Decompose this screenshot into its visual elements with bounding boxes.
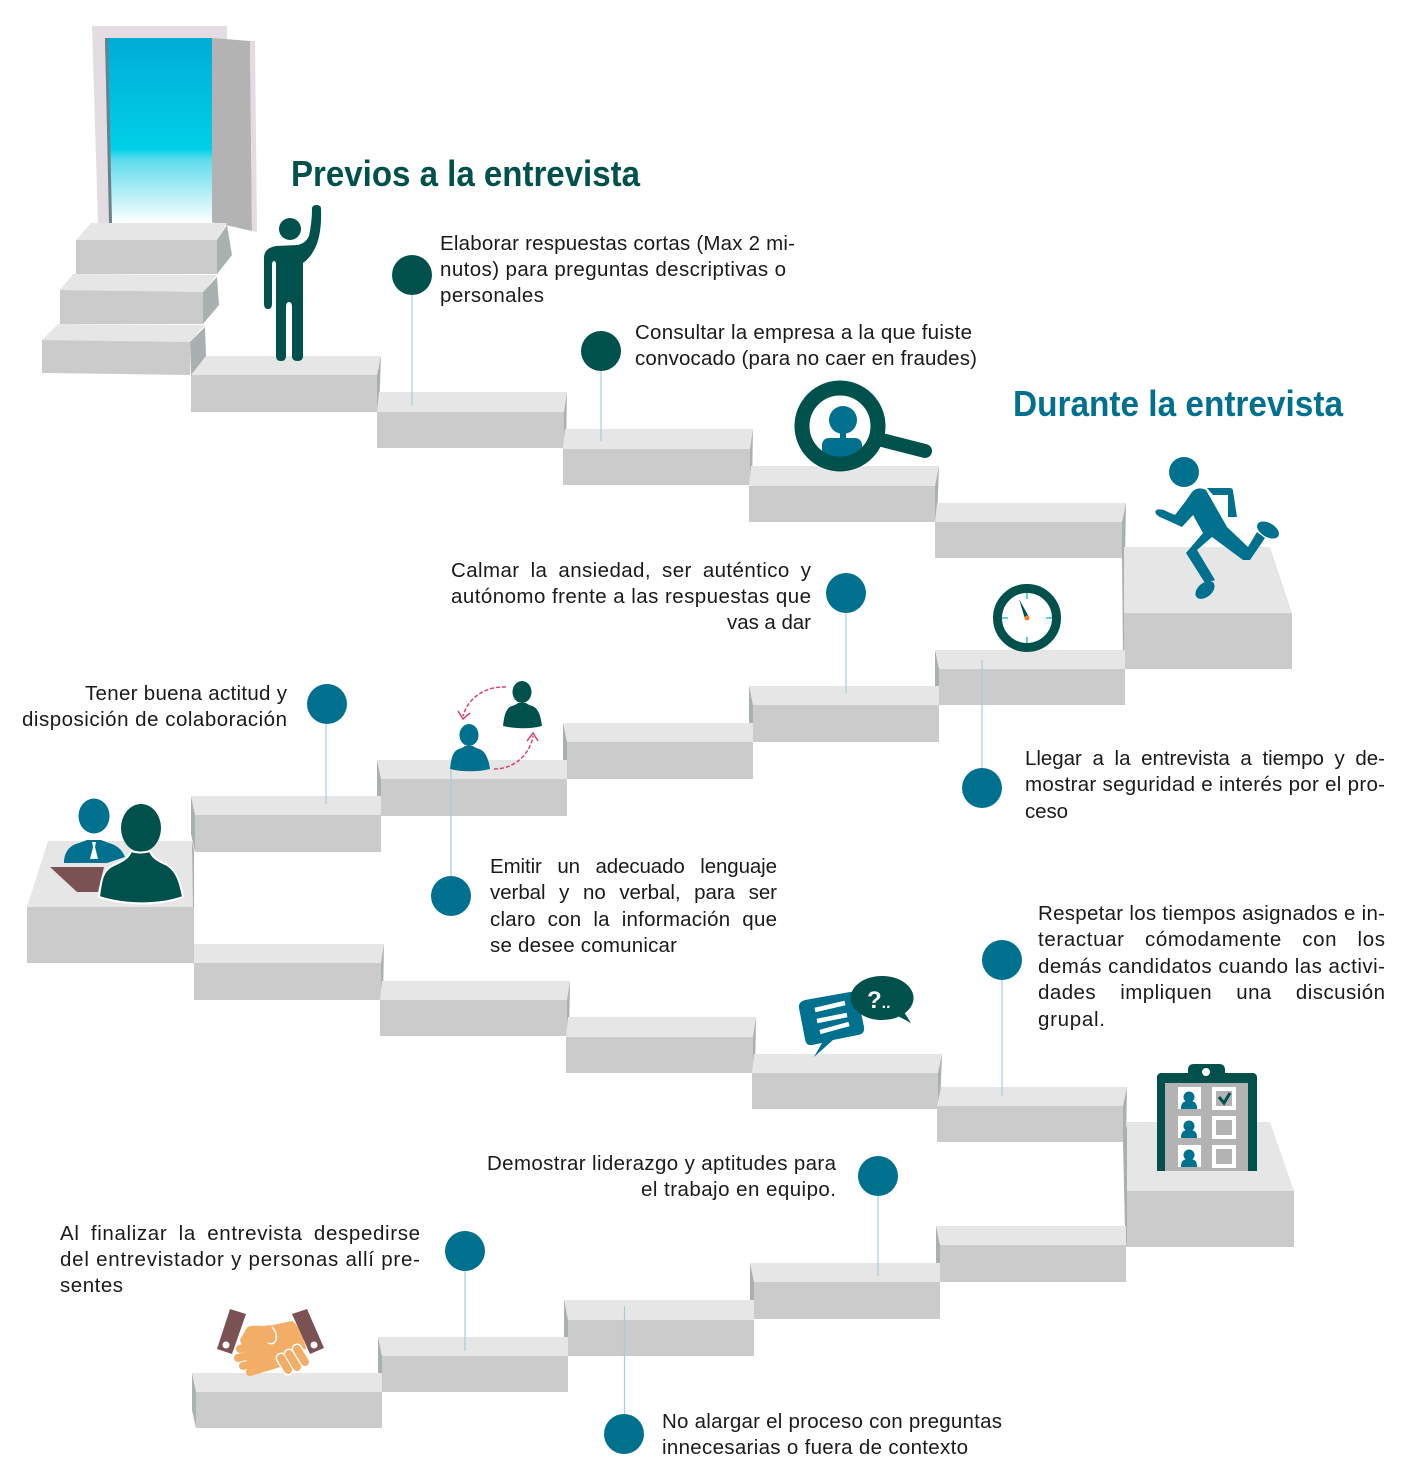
bullet: despedirse <box>445 1231 485 1351</box>
landing right 1 <box>1122 547 1292 669</box>
text: no alargar <box>662 1410 1002 1459</box>
text: buena actitud: Tener buena actitud y <box>85 682 288 705</box>
text: respetar los tiempos: grupal. <box>1038 1008 1105 1031</box>
text: lenguaje verbal: Emitir un adecuado lenguaje <box>490 855 777 878</box>
stairs row 3: descending to the right <box>194 944 1127 1142</box>
bullet: no alargar <box>604 1306 644 1454</box>
icon: person waving <box>264 205 321 361</box>
text: calmar la ansiedad: Calmar la ansiedad, ser auténtico y <box>451 559 812 582</box>
text: buena actitud: disposición de colaboración <box>22 708 287 731</box>
text: liderazgo: Demostrar liderazgo y aptitudes para <box>487 1152 837 1175</box>
text: calmar la ansiedad: autónomo frente a las respuestas que <box>451 585 811 608</box>
landing right 2 <box>1123 1122 1294 1247</box>
text: llegar a tiempo: Llegar a la entrevista a tiempo y de- <box>1025 747 1385 770</box>
text: respetar los tiempos: demás candidatos cuando las activi- <box>1038 955 1385 978</box>
text: no alargar: No alargar el proceso con preguntas <box>662 1410 1002 1433</box>
bullet: respetar los tiempos <box>982 940 1022 1096</box>
icon: clipboard checklist <box>1157 1064 1257 1171</box>
text: respetar los tiempos: Respetar los tiempos asignados e in- <box>1038 902 1385 925</box>
text: consultar la empresa: convocado (para no caer en fraudes) <box>635 347 977 370</box>
text: despedirse: sentes <box>60 1274 123 1297</box>
text: despedirse: del entrevistador y personas allí pre- <box>60 1248 420 1271</box>
text: elaborar respuestas: personales <box>440 284 544 307</box>
text: liderazgo <box>487 1152 837 1201</box>
text: despedirse <box>60 1222 420 1297</box>
text: consultar la empresa: Consultar la empresa a la que fuiste <box>635 321 972 344</box>
bullet: liderazgo <box>858 1156 898 1276</box>
icon: open door <box>92 26 257 232</box>
text: calmar la ansiedad <box>451 559 812 634</box>
bullet: lenguaje verbal <box>431 770 471 916</box>
stairs row 2: descending to the left <box>191 650 1125 852</box>
stairs row 1: descending to the right <box>191 356 1126 558</box>
text: lenguaje verbal: verbal y no verbal, para ser <box>490 881 777 904</box>
text: respetar los tiempos <box>1038 902 1385 1031</box>
icon: clock <box>998 588 1056 648</box>
text: respetar los tiempos: dades impliquen una discusión <box>1038 981 1385 1004</box>
text: buena actitud <box>22 682 288 731</box>
text: lenguaje verbal: se desee comunicar <box>490 934 677 957</box>
text: lenguaje verbal: claro con la información que <box>490 908 777 931</box>
text: despedirse: Al finalizar la entrevista despedirse <box>60 1222 420 1245</box>
text: lenguaje verbal <box>490 855 777 957</box>
icon: magnifier with person <box>802 388 925 468</box>
icon: speech bubbles: ?.. <box>867 987 891 1014</box>
text: elaborar respuestas: Elaborar respuestas cortas (Max 2 mi- <box>440 232 795 255</box>
landing left <box>27 841 194 963</box>
entrance stairs <box>42 223 232 375</box>
text: no alargar: innecesarias o fuera de contexto <box>662 1436 968 1459</box>
text: consultar la empresa <box>635 321 977 370</box>
stairs row 4: descending to the left <box>192 1226 1126 1428</box>
bullet: buena actitud <box>307 684 347 804</box>
icon: running person <box>1154 457 1282 602</box>
icon: speech bubbles <box>799 976 914 1057</box>
bullet: llegar a tiempo <box>962 660 1002 808</box>
icon: interview scene <box>50 798 183 903</box>
bullet: elaborar respuestas <box>392 255 432 405</box>
text: llegar a tiempo <box>1025 747 1385 823</box>
text: respetar los tiempos: teractuar cómodamente con los <box>1038 928 1385 951</box>
text: calmar la ansiedad: vas a dar <box>727 611 811 634</box>
text: elaborar respuestas <box>440 232 795 307</box>
text: liderazgo: el trabajo en equipo. <box>641 1178 836 1201</box>
icon: two people exchanging <box>450 681 542 771</box>
text: llegar a tiempo: ceso <box>1025 800 1068 823</box>
bullet: calmar la ansiedad <box>826 573 866 693</box>
text: elaborar respuestas: nutos) para preguntas descriptivas o <box>440 258 786 281</box>
text: llegar a tiempo: mostrar seguridad e interés por el pro- <box>1025 773 1385 796</box>
heading: durante la entrevista: Durante la entrevista <box>1013 383 1344 424</box>
bullet: consultar la empresa <box>581 331 621 441</box>
icon: handshake <box>217 1309 324 1372</box>
heading: previos a la entrevista: Previos a la entrevista <box>291 153 641 194</box>
